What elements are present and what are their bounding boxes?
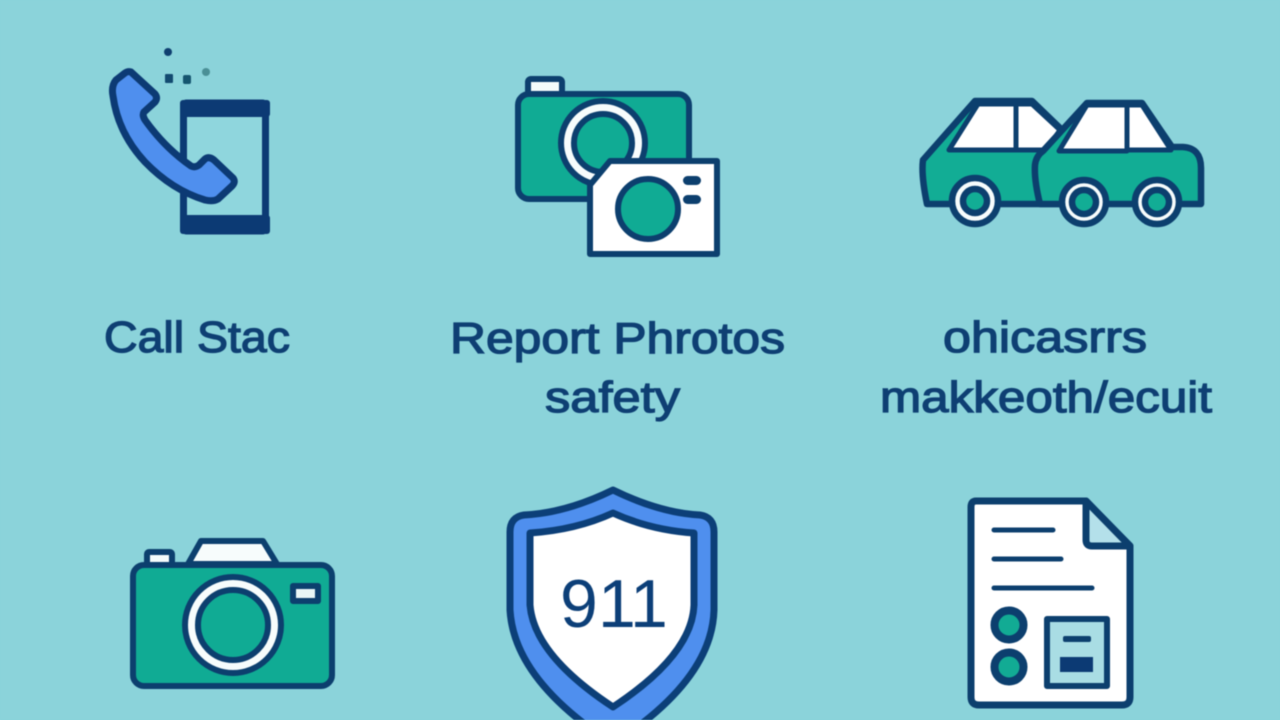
right car: [1035, 103, 1201, 224]
icon: document: [971, 501, 1130, 705]
label: Report Phrotos safety: [450, 314, 785, 422]
front camera: [590, 161, 717, 254]
label: Report Phrotos safety: safety: [545, 373, 680, 422]
icon: 911 shield: [510, 490, 714, 720]
label: ohicasrrs makkeoth/ecuit: ohicasrrs: [943, 313, 1147, 362]
shield number: 911: [560, 566, 668, 642]
icon: camera: [133, 541, 332, 686]
smartphone: [180, 100, 270, 234]
text lines: [994, 530, 1092, 588]
icon: phone handset and smartphone: [112, 48, 270, 234]
left car: [922, 101, 1060, 224]
back camera: [518, 79, 689, 199]
handset: [112, 72, 234, 201]
label: ohicasrrs makkeoth/ecuit: [880, 313, 1212, 422]
teal bullets: [994, 610, 1024, 682]
label: ohicasrrs makkeoth/ecuit: makkeoth/ecuit: [880, 373, 1212, 422]
label: Report Phrotos safety: Report Phrotos: [450, 314, 785, 363]
icon: two cars: [922, 101, 1201, 224]
form box: [1047, 619, 1107, 686]
signal dots: [164, 48, 210, 84]
page: [971, 501, 1130, 705]
label: Call Stac: Call Stac: [104, 313, 290, 362]
folded corner: [1086, 501, 1130, 546]
icon: two cameras: [518, 79, 717, 254]
